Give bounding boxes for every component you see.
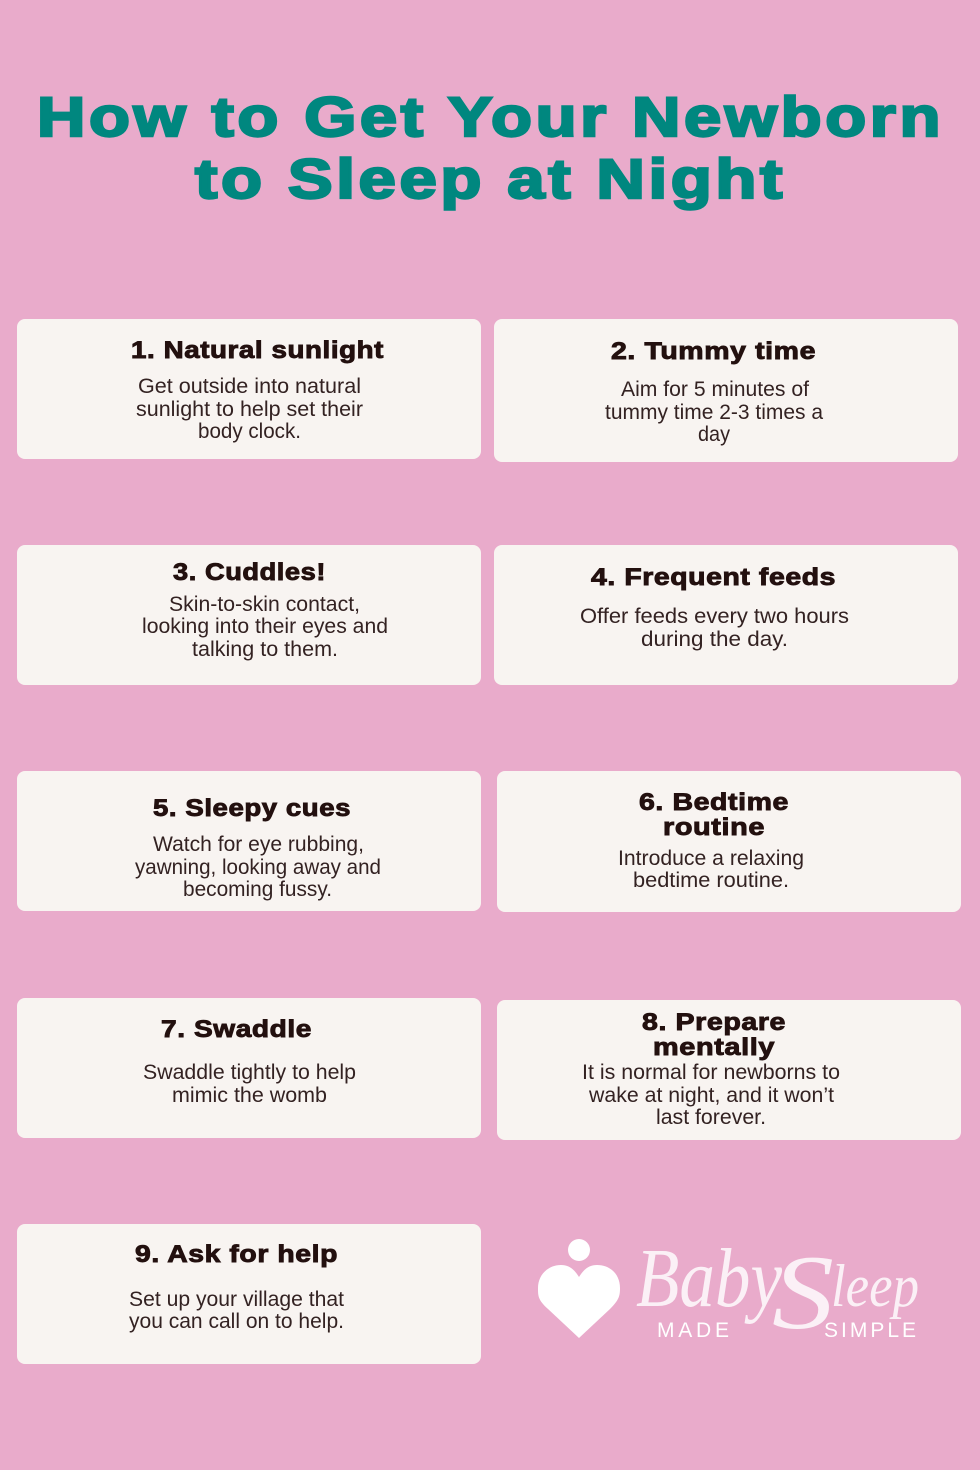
- logo: Baby Sleep Made Simple: [538, 1232, 919, 1351]
- panel: 7. Swaddle: 7. Swaddle: [161, 1016, 312, 1043]
- panel: 1. Natural sunlight: Get outside into natural: [138, 375, 361, 398]
- panel: 7. Swaddle: [17, 998, 481, 1138]
- logo wordmark: MADE: [657, 1319, 729, 1342]
- panel: 2. Tummy time: [494, 319, 958, 462]
- panel: 8. Prepare mentally: wake at night, and it won’t: [588, 1084, 834, 1107]
- panel: 3. Cuddles: [17, 545, 481, 685]
- panel: 1. Natural sunlight: body clock.: [198, 420, 301, 443]
- panel: 3. Cuddles: Skin-to-skin contact,: [169, 593, 360, 616]
- title: to Sleep at Night: [195, 147, 786, 210]
- panel: 3. Cuddles: talking to them.: [192, 638, 338, 661]
- icon: heart with baby: [538, 1239, 620, 1338]
- panel: 9. Ask for help: [17, 1224, 481, 1364]
- panel: 1. Natural sunlight: 1. Natural sunlight: [131, 337, 384, 364]
- panel: 4. Frequent feeds: [494, 545, 958, 685]
- logo wordmark: [636, 1232, 919, 1351]
- panel: 3. Cuddles: looking into their eyes and: [142, 615, 388, 638]
- panel: 4. Frequent feeds: 4. Frequent feeds: [591, 564, 836, 591]
- panel: 2. Tummy time: day: [698, 423, 730, 446]
- panel: 7. Swaddle: mimic the womb: [172, 1084, 327, 1107]
- panel: 3. Cuddles: 3. Cuddles!: [173, 559, 326, 586]
- logo wordmark: leep: [831, 1253, 919, 1319]
- panel: 6. Bedtime routine: 6. Bedtime: [639, 789, 789, 816]
- panel: 2. Tummy time: 2. Tummy time: [611, 338, 816, 365]
- panel: 6. Bedtime routine: routine: [663, 814, 765, 841]
- panel: 5. Sleepy cues: 5. Sleepy cues: [153, 795, 351, 822]
- panel: 8. Prepare mentally: It is normal for newborns to: [582, 1061, 840, 1084]
- panel: 5. Sleepy cues: becoming fussy.: [183, 878, 332, 901]
- panel: 9. Ask for help: you can call on to help.: [129, 1310, 344, 1333]
- panel: 9. Ask for help: 9. Ask for help: [135, 1241, 338, 1268]
- panel: 6. Bedtime routine: bedtime routine.: [633, 869, 789, 892]
- panel: 1. Natural sunlight: sunlight to help set their: [136, 398, 363, 421]
- panel: 8. Prepare mentally: 8. Prepare: [642, 1009, 786, 1036]
- panel: 6. Bedtime routine: Introduce a relaxing: [618, 847, 804, 870]
- panel: 2. Tummy time: Aim for 5 minutes of: [621, 378, 809, 401]
- panel: 5. Sleepy cues: yawning, looking away and: [135, 856, 381, 879]
- panel: 5. Sleepy cues: [17, 771, 481, 911]
- panel: 1. Natural sunlight: [17, 319, 481, 459]
- title: How to Get Your Newborn: [37, 85, 944, 148]
- panel: 5. Sleepy cues: Watch for eye rubbing,: [153, 833, 364, 856]
- panel: 4. Frequent feeds: Offer feeds every two hours: [580, 605, 849, 628]
- panel: 8. Prepare mentally: [497, 1000, 961, 1140]
- panel: 8. Prepare mentally: mentally: [653, 1034, 775, 1061]
- panel: 8. Prepare mentally: last forever.: [656, 1106, 766, 1129]
- panel: 4. Frequent feeds: during the day.: [641, 628, 788, 651]
- panel: 7. Swaddle: Swaddle tightly to help: [143, 1061, 356, 1084]
- logo wordmark: Baby: [636, 1232, 783, 1325]
- panel: 6. Bedtime routine: [497, 771, 961, 912]
- panel: 9. Ask for help: Set up your village that: [129, 1288, 344, 1311]
- panel: 2. Tummy time: tummy time 2-3 times a: [605, 401, 823, 424]
- logo wordmark: SIMPLE: [824, 1319, 916, 1342]
- title: [37, 85, 944, 210]
- logo wordmark: S: [772, 1234, 834, 1351]
